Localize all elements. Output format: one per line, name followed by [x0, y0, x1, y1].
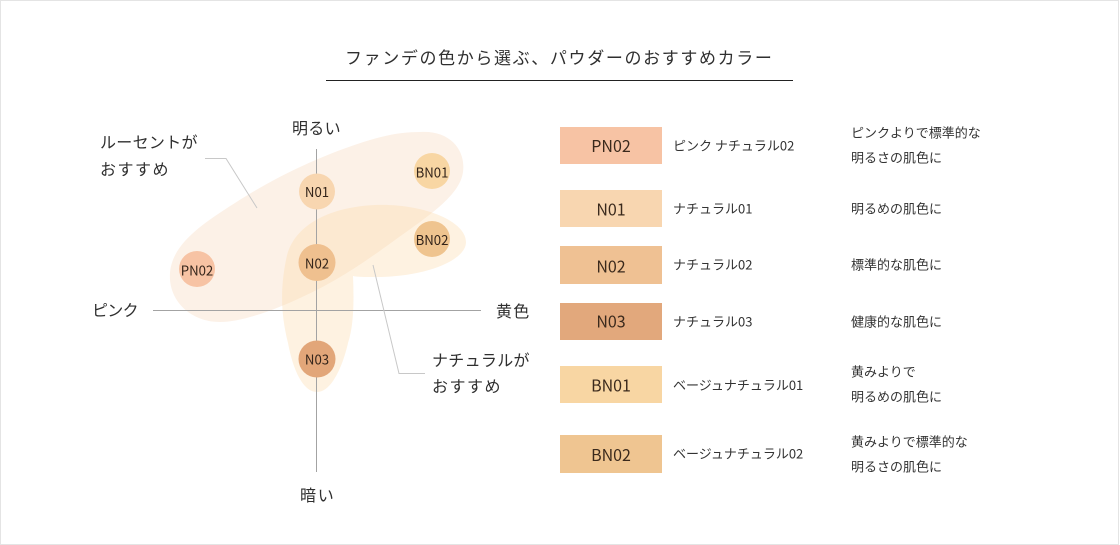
marker: BN02: BN02	[416, 230, 448, 249]
marker: N03	[298, 340, 336, 378]
row: BN01: 黄みよりで	[851, 362, 916, 380]
marker: N01	[299, 174, 335, 210]
row: BN01: ベージュナチュラル01	[673, 375, 803, 394]
row: N01: ナチュラル01	[673, 198, 752, 218]
row: N03	[560, 303, 942, 340]
callout: natural: ナチュラルが	[432, 347, 530, 371]
chart: color map	[92, 115, 531, 506]
row: N01	[560, 190, 942, 227]
callout: lucent: ルーセントが	[100, 129, 198, 153]
marker: BN02	[414, 221, 450, 257]
marker: BN01	[414, 153, 450, 189]
area: lucent recommended	[170, 132, 463, 322]
row: N03: N03	[596, 308, 626, 332]
row: BN02: 黄みよりで標準的な	[851, 432, 968, 450]
row: N01: N01	[596, 196, 626, 220]
marker: PN02: PN02	[181, 260, 213, 280]
row: BN02: 明るさの肌色に	[851, 456, 942, 476]
row: PN02	[560, 122, 981, 166]
callout: lucent	[100, 129, 257, 208]
callout: natural: おすすめ	[432, 373, 502, 397]
axis label: yellow: 黄色	[496, 298, 531, 322]
title: ファンデの色から選ぶ、パウダーのおすすめカラー	[345, 44, 774, 69]
row: N03: 健康的な肌色に	[851, 312, 942, 330]
row: BN02	[560, 432, 968, 476]
row: N02: 標準的な肌色に	[851, 254, 942, 274]
marker: N03: N03	[305, 350, 329, 368]
row: N01: 明るめの肌色に	[851, 198, 942, 218]
color list	[560, 122, 981, 476]
marker: N01: N01	[305, 182, 329, 201]
row: N02	[560, 246, 942, 284]
axis: vertical	[316, 149, 318, 472]
callout: natural	[373, 265, 530, 397]
row: BN02: ベージュナチュラル02	[673, 444, 803, 462]
marker: BN01: BN01	[416, 162, 448, 182]
row: PN02: PN02	[591, 133, 631, 157]
marker: N02	[298, 244, 336, 281]
area: natural recommended	[282, 205, 466, 392]
axis label: bright: 明るい	[292, 115, 341, 139]
row: PN02: ピンク ナチュラル02	[673, 136, 794, 154]
row: BN01	[560, 362, 942, 406]
callout: lucent: おすすめ	[100, 156, 170, 180]
row: BN02: BN02	[591, 442, 631, 466]
row: BN01: 明るめの肌色に	[851, 386, 942, 406]
axis: horizontal	[153, 310, 481, 312]
marker: PN02	[179, 251, 215, 287]
row: N02: N02	[596, 254, 626, 278]
row: PN02: 明るさの肌色に	[851, 148, 942, 166]
row: N02: ナチュラル02	[673, 254, 752, 274]
axis label: pink: ピンク	[92, 297, 138, 321]
marker: N02: N02	[305, 254, 329, 272]
axis label: dark: 暗い	[300, 482, 336, 506]
row: N03: ナチュラル03	[673, 312, 752, 330]
row: PN02: ピンクよりで標準的な	[851, 122, 981, 142]
row: BN01: BN01	[591, 372, 631, 396]
